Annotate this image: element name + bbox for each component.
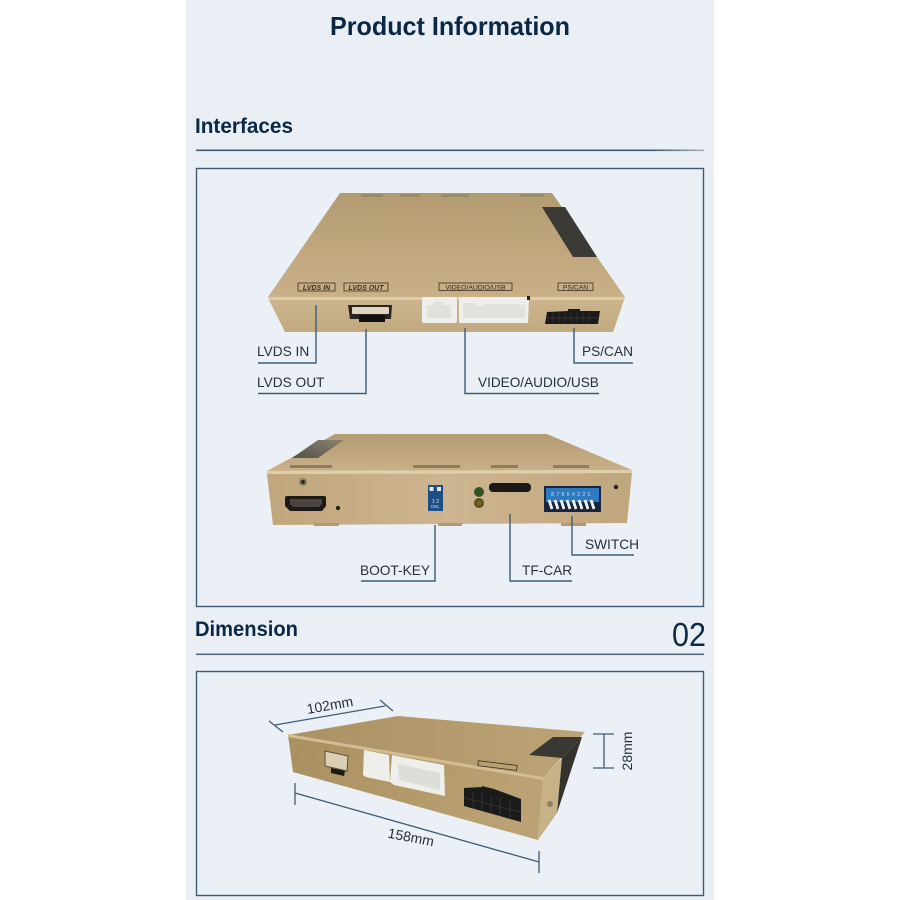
callout: VIDEO/AUDIO/USB: VIDEO/AUDIO/USB xyxy=(478,375,599,390)
connector: PS/CAN xyxy=(545,309,600,324)
panel: interfaces xyxy=(196,168,704,606)
port: TF card slot xyxy=(489,483,531,492)
heading rule: Dimension xyxy=(196,654,704,655)
callout: PS/CAN xyxy=(574,328,633,363)
silk label: PS/CAN xyxy=(558,283,593,292)
silk label: LVDS IN xyxy=(298,283,335,292)
callout: TF-CAR: TF-CAR xyxy=(522,563,572,578)
silk label: LVDS IN: LVDS IN xyxy=(303,285,331,292)
dimension: height 28mm: 28mm xyxy=(619,732,635,770)
title: Product Information xyxy=(330,11,570,41)
callout: BOOT-KEY: BOOT-KEY xyxy=(360,563,430,578)
heading: Dimension: Dimension xyxy=(195,618,298,641)
callout: LVDS OUT xyxy=(257,329,366,394)
callout: LVDS IN xyxy=(257,305,316,363)
silk label: LVDS OUT xyxy=(344,283,388,292)
callout: PS/CAN: PS/CAN xyxy=(582,344,633,359)
connector: LVDS xyxy=(325,751,348,776)
callout: LVDS IN: LVDS IN xyxy=(257,344,309,359)
connector: white small xyxy=(363,750,390,782)
page background panel xyxy=(186,0,714,900)
dimension: height 28mm xyxy=(593,732,635,770)
heading: Interfaces: Interfaces xyxy=(195,115,293,138)
silk label: VIDEO/AUDIO/USB: VIDEO/AUDIO/USB xyxy=(445,284,506,292)
connector: VIDEO/AUDIO white small xyxy=(422,297,457,323)
callout: BOOT-KEY xyxy=(360,525,435,581)
connector: white large xyxy=(390,755,445,796)
dimension: length 158mm: 158mm xyxy=(387,825,435,849)
callout: VIDEO/AUDIO/USB xyxy=(465,328,599,394)
silk label: VIDEO/AUDIO/USB xyxy=(439,283,512,292)
callout: LVDS OUT: LVDS OUT xyxy=(257,375,325,390)
connector: LVDS OUT xyxy=(348,305,392,322)
port: BOOT-KEY switch: ON↓ xyxy=(431,504,440,509)
callout: SWITCH xyxy=(572,516,639,555)
port: DIP switch xyxy=(544,486,601,512)
LED indicators xyxy=(474,487,484,508)
port: BOOT-KEY switch xyxy=(428,485,443,511)
callout: SWITCH: SWITCH xyxy=(585,537,639,552)
silk label: PS/CAN: PS/CAN xyxy=(563,284,588,292)
connector: VIDEO/AUDIO white large xyxy=(459,296,530,323)
silk label: LVDS OUT: LVDS OUT xyxy=(348,285,384,292)
screw hole and dots xyxy=(299,478,618,510)
device feet xyxy=(314,523,586,526)
section number: 02 xyxy=(672,616,706,653)
dimension: width 102mm xyxy=(269,693,393,732)
dimension: length 158mm xyxy=(295,783,539,873)
port: HDMI xyxy=(285,496,326,511)
port: DIP switch: 87654321 xyxy=(551,492,593,498)
panel: dimension xyxy=(196,672,704,896)
device: rear view xyxy=(268,193,625,332)
port: BOOT-KEY switch: 1 2 xyxy=(432,499,439,505)
dimension: width 102mm: 102mm xyxy=(305,693,354,717)
connector: black power xyxy=(464,786,521,822)
callout: TF-CAR xyxy=(510,514,572,581)
device: angled view xyxy=(288,716,585,840)
device: front view xyxy=(267,434,632,526)
heading rule: Interfaces xyxy=(196,150,704,151)
